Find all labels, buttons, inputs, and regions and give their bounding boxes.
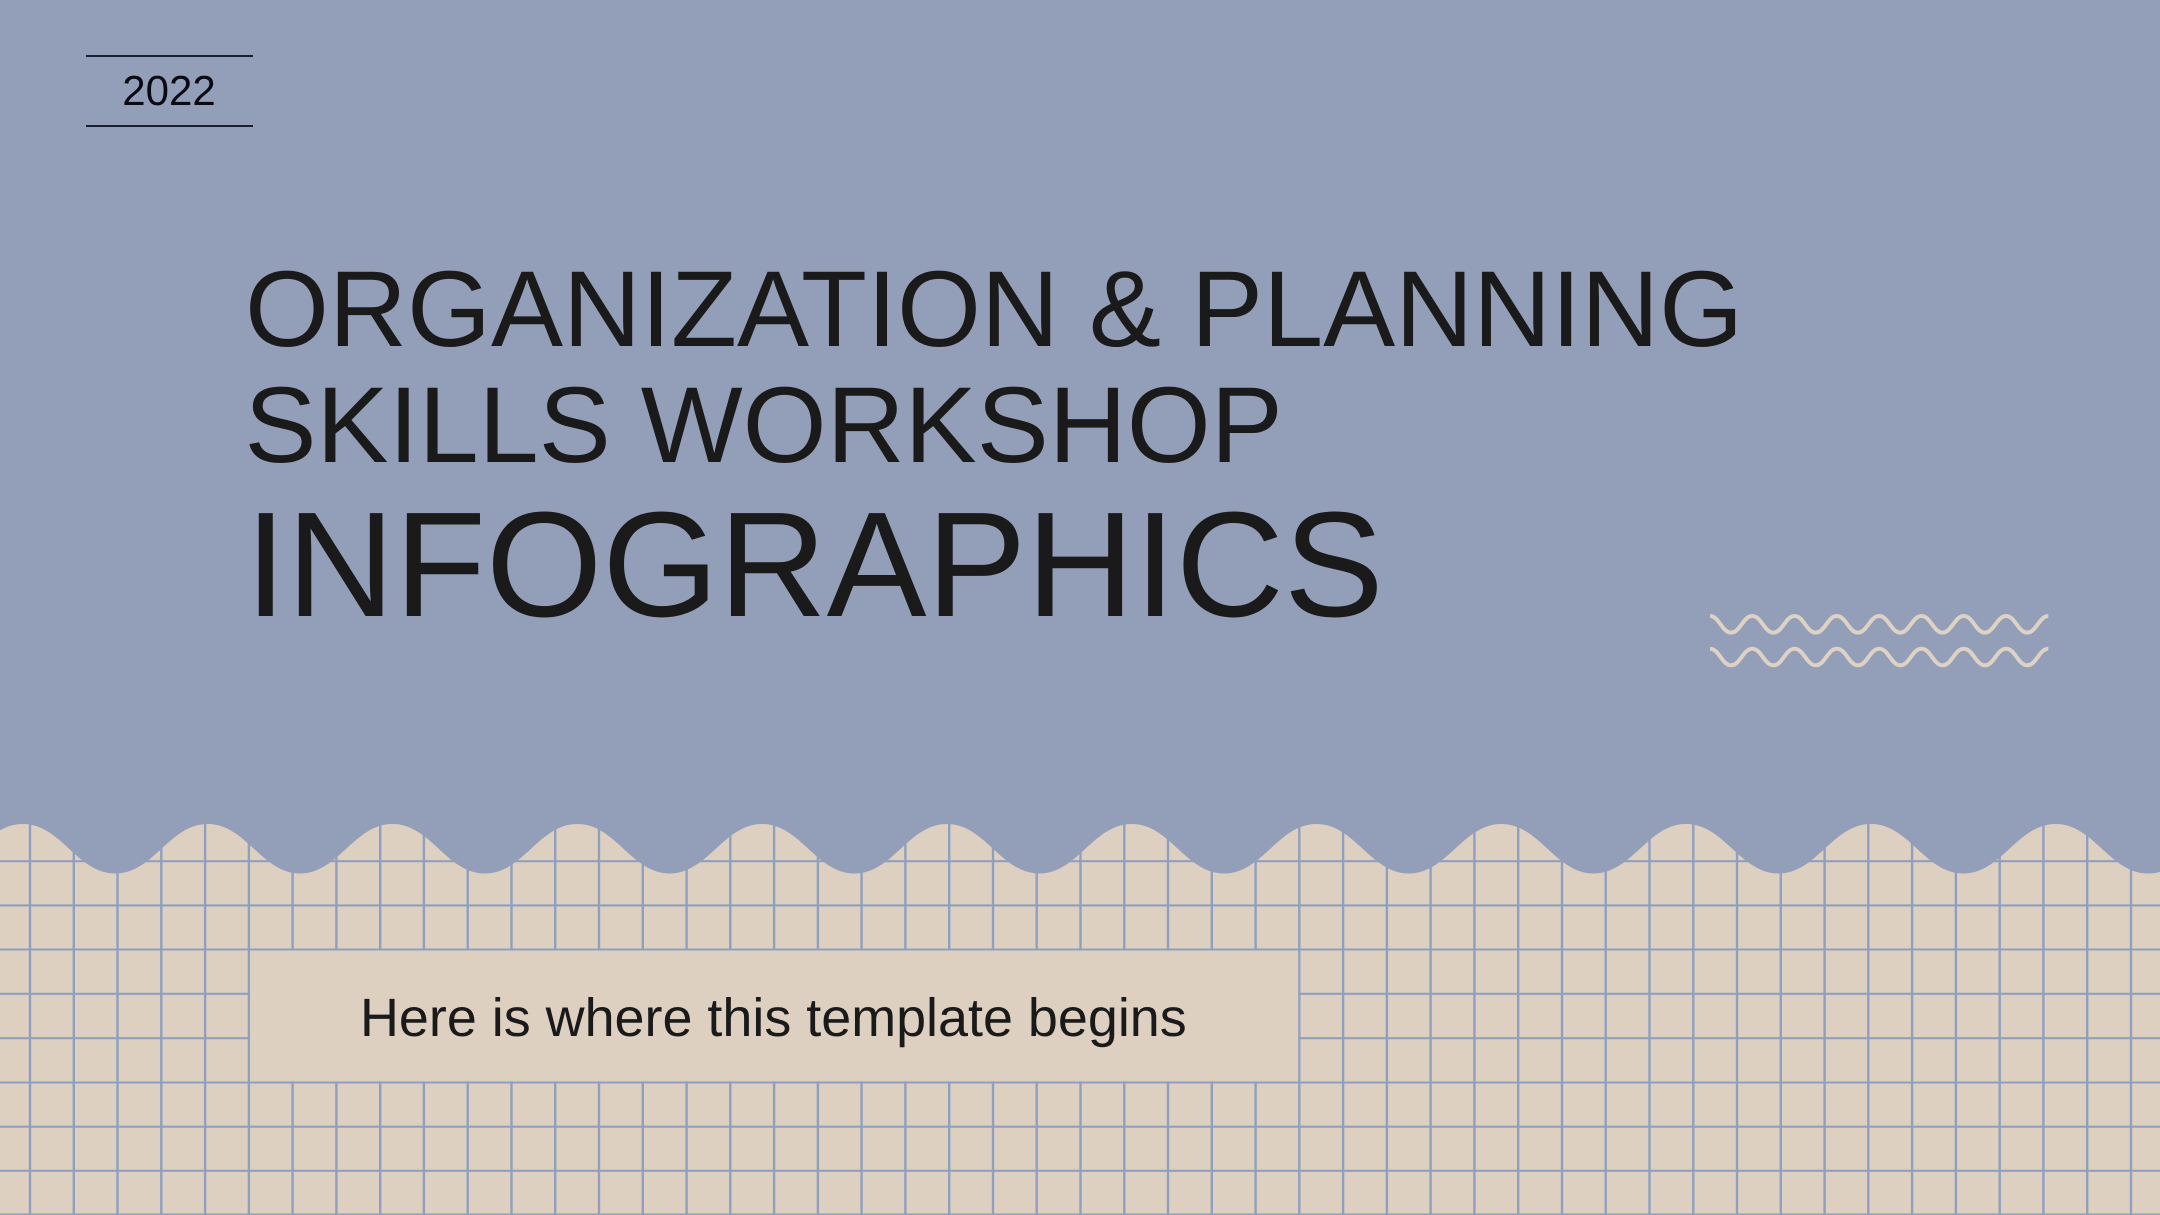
- scalloped blue top panel: [0, 0, 2160, 874]
- year tag: 2022: [122, 67, 216, 114]
- subtitle text: Here is where this template begins: [360, 988, 1187, 1048]
- decorative squiggle lines: [1710, 616, 2048, 665]
- title: [244, 248, 1743, 648]
- subtitle box: [250, 951, 1298, 1081]
- lower panel: beige graph paper: [0, 800, 2160, 1215]
- title: SKILLS WORKSHOP: [244, 364, 1283, 485]
- title: ORGANIZATION & PLANNING: [245, 248, 1743, 369]
- title: INFOGRAPHICS: [245, 481, 1384, 648]
